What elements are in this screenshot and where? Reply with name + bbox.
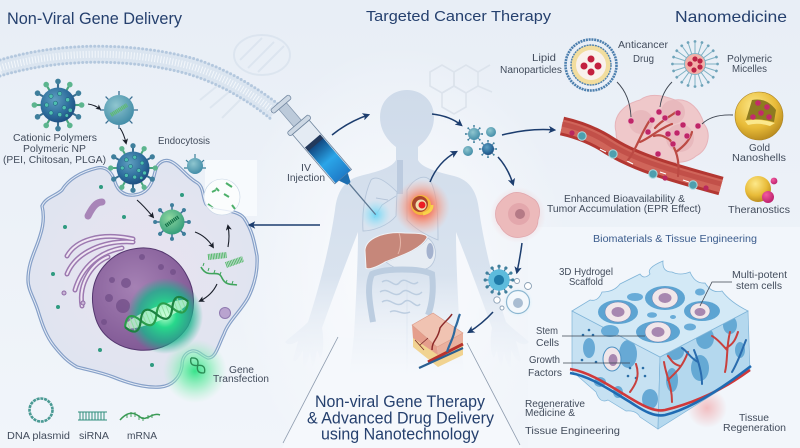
membrane inner highlight bbox=[28, 160, 257, 387]
vessel particles bbox=[569, 130, 709, 191]
cell body and membrane bbox=[28, 160, 257, 387]
top face bbox=[572, 261, 748, 357]
legend: DNA plasmid bbox=[7, 398, 70, 442]
mitochondrion bbox=[88, 202, 102, 216]
flange bbox=[287, 114, 311, 136]
label: Regenerative Medicine & Tissue Engineering bbox=[525, 399, 620, 437]
label: Growth Factors: Growth bbox=[529, 355, 560, 366]
label: Cationic Polymers bbox=[3, 133, 106, 166]
faint hexagon molecule bbox=[430, 65, 492, 114]
theranostics icon bbox=[745, 176, 777, 203]
gold nanoshell bbox=[735, 92, 783, 140]
label: Multi-potent stem cells bbox=[732, 270, 787, 292]
cell membrane bilayer arc bbox=[0, 46, 278, 120]
blood vessel bbox=[562, 124, 721, 186]
legend: mRNA: mRNA bbox=[127, 431, 157, 442]
main title bbox=[307, 393, 495, 444]
DNA in budding vesicle bbox=[188, 356, 207, 375]
trachea bbox=[397, 160, 403, 194]
tumor cell bbox=[490, 187, 546, 243]
label: Theranostics: Theranostics bbox=[728, 205, 790, 216]
label: Tissue Regeneration: Tissue bbox=[739, 413, 769, 424]
heading: Non-Viral Gene Delivery: Non-Viral Gene Delivery bbox=[7, 9, 182, 28]
nanoparticle: inside the cell bbox=[153, 203, 191, 241]
arrow: immune cells to skin bbox=[469, 312, 493, 332]
label: Stem Cells bbox=[536, 326, 559, 349]
label: Gold Nanoshells: Nanoshells bbox=[732, 153, 786, 164]
label: Polymeric Micelles: Polymeric bbox=[727, 54, 772, 65]
leader lines to tumor bbox=[617, 82, 733, 124]
arrow: syringe to body bbox=[332, 115, 368, 135]
label: IV Injection: IV bbox=[301, 163, 311, 174]
heading: Nanomedicine: Nanomedicine bbox=[675, 9, 787, 26]
legend: siRNA bbox=[78, 412, 109, 442]
label: EPR effect: Enhanced Bioavailability & bbox=[564, 194, 685, 205]
arrow: nanoparticles to nanomedicine bbox=[502, 130, 554, 135]
vesicle bbox=[220, 308, 230, 318]
blue liquid bbox=[308, 137, 351, 183]
faint background DNA bbox=[200, 35, 290, 118]
tumor glow bbox=[394, 179, 450, 235]
golgi apparatus bbox=[62, 236, 133, 306]
endosome bbox=[204, 179, 240, 215]
label: Gene Transfection: Gene bbox=[229, 365, 254, 376]
lungs bbox=[363, 177, 438, 240]
plunger seal bbox=[305, 134, 323, 151]
intestines bbox=[369, 270, 433, 322]
left face bbox=[572, 311, 660, 429]
bottom centre light wedge bbox=[282, 337, 522, 448]
label: Regenerative Medicine & Tissue Engineering: Medicine & bbox=[525, 408, 575, 419]
needle bbox=[348, 182, 376, 215]
heading: Targeted Cancer Therapy: Targeted Cancer Therapy bbox=[366, 8, 552, 25]
lipid nanoparticle bbox=[566, 40, 616, 90]
label: Multi-potent stem cells: stem cells bbox=[736, 281, 782, 292]
siRNA and mRNA in cytoplasm bbox=[201, 255, 243, 285]
main title: using Nanotechnology bbox=[321, 426, 480, 444]
label: EPR effect: Tumor Accumulation (EPR Effect) bbox=[547, 204, 701, 215]
cell bbox=[28, 160, 257, 403]
label: Tissue Regeneration: Regeneration bbox=[723, 423, 786, 434]
label: EPR effect bbox=[547, 194, 701, 215]
label: Multi-potent stem cells: Multi-potent bbox=[732, 270, 787, 281]
needle glow bbox=[355, 193, 397, 236]
immune cells and vesicles bbox=[484, 265, 533, 317]
label: Tissue Regeneration bbox=[723, 413, 786, 434]
heading: Biomaterials & Tissue Engineering: Biomaterials & Tissue Engineering bbox=[593, 234, 757, 245]
liver bbox=[365, 233, 427, 269]
label: Anticancer Drug: Anticancer bbox=[618, 40, 669, 51]
organs bbox=[363, 160, 450, 322]
arrow: NP to loaded NP bbox=[88, 104, 100, 109]
right face bbox=[658, 311, 750, 429]
pores on faces bbox=[583, 316, 745, 409]
pores on top bbox=[601, 288, 705, 337]
label: Growth Factors bbox=[528, 355, 562, 379]
label: Regenerative Medicine & Tissue Engineering: Tissue Engineering bbox=[525, 426, 620, 437]
label: Gene Transfection: Transfection bbox=[213, 374, 269, 385]
barrel bbox=[292, 120, 351, 184]
tumor vasculature branches bbox=[628, 112, 692, 176]
tumor cloud behind vessel bbox=[615, 95, 708, 162]
label: Stem Cells: Cells bbox=[536, 338, 559, 349]
label: Cationic Polymers: Cationic Polymers bbox=[13, 133, 97, 144]
legend: DNA plasmid: DNA plasmid bbox=[7, 431, 70, 442]
nanoparticle: small teal at membrane bbox=[184, 154, 206, 174]
nanoparticle cluster bbox=[463, 125, 497, 158]
arrows inside cell bbox=[137, 200, 229, 301]
growth factor dots bbox=[581, 329, 646, 379]
cytoplasm dots bbox=[51, 185, 184, 367]
nanoparticle: loaded with nucleic acid bbox=[100, 91, 138, 129]
legend: mRNA bbox=[120, 412, 160, 442]
nucleus bbox=[92, 248, 203, 354]
arrow: lung to nanoparticles bbox=[430, 152, 456, 182]
human body silhouette bbox=[285, 90, 529, 385]
plunger head bbox=[270, 94, 292, 114]
plunger rod bbox=[278, 102, 304, 130]
main blood vessels bbox=[570, 366, 751, 415]
stomach bbox=[386, 238, 436, 271]
hydrogel scaffold bbox=[570, 261, 751, 429]
label: 3D Hydrogel Scaffold: Scaffold bbox=[569, 277, 603, 288]
drug particles in tumor bbox=[628, 109, 701, 157]
main title: Non-viral Gene Therapy bbox=[315, 393, 486, 411]
label: Growth Factors: Factors bbox=[528, 368, 562, 379]
nanoparticle: polymeric NP bbox=[32, 79, 84, 131]
bottom-right panel background bbox=[528, 227, 800, 448]
label: Gene Transfection bbox=[213, 365, 269, 385]
label: Stem Cells: Stem bbox=[536, 326, 558, 337]
stem cells on top face bbox=[598, 286, 720, 343]
polymeric micelle bbox=[671, 40, 719, 88]
arrow: body to cell bbox=[250, 224, 320, 226]
label: Cationic Polymers: (PEI, Chitosan, PLGA) bbox=[3, 155, 106, 166]
label: Gold Nanoshells bbox=[732, 143, 786, 164]
label: Lipid Nanoparticles bbox=[500, 53, 562, 76]
glow: gene transfection bbox=[163, 339, 227, 403]
label: Polymeric Micelles: Micelles bbox=[732, 64, 767, 75]
left-face cell bbox=[603, 347, 621, 371]
label: 3D Hydrogel Scaffold: 3D Hydrogel bbox=[559, 267, 613, 278]
central light area bbox=[230, 0, 570, 448]
capillaries bbox=[630, 332, 746, 402]
hub bbox=[339, 173, 354, 187]
label: Polymeric Micelles bbox=[727, 54, 772, 75]
spleen bbox=[426, 243, 434, 259]
label: Anticancer Drug: Drug bbox=[633, 54, 654, 65]
DNA helix in nucleus bbox=[122, 294, 191, 334]
arrow: nanoparticles to tumor cell bbox=[498, 157, 513, 184]
nanoparticle: endocytosed at membrane bbox=[108, 143, 158, 193]
white endosome background bbox=[205, 160, 257, 216]
main title: & Advanced Drug Delivery bbox=[307, 410, 495, 428]
label: Cationic Polymers: Polymeric NP bbox=[23, 144, 86, 155]
label: Anticancer Drug bbox=[618, 40, 669, 65]
regeneration glow bbox=[687, 388, 727, 428]
label: Lipid Nanoparticles: Nanoparticles bbox=[500, 65, 562, 76]
arrow: head to nanoparticles bbox=[432, 114, 461, 125]
label: IV Injection: Injection bbox=[287, 173, 325, 184]
label: IV Injection bbox=[287, 163, 325, 184]
diagonal lines framing title bbox=[283, 337, 520, 445]
tumor bbox=[411, 195, 432, 215]
legend: siRNA: siRNA bbox=[79, 431, 109, 442]
arrow: loaded NP to cell bbox=[120, 128, 126, 143]
label: Lipid Nanoparticles: Lipid bbox=[532, 53, 556, 64]
leader lines: scaffold bbox=[562, 282, 732, 363]
label: Endocytosis: Endocytosis bbox=[158, 136, 210, 147]
label: 3D Hydrogel Scaffold bbox=[559, 267, 613, 288]
syringe bbox=[268, 92, 397, 236]
label: Regenerative Medicine & Tissue Engineering: Regenerative bbox=[525, 399, 585, 410]
arrow: tumor cell to immune cells bbox=[517, 243, 522, 272]
skin tissue block bbox=[412, 313, 463, 368]
arrows in central flow bbox=[250, 114, 554, 332]
label: Gold Nanoshells: Gold bbox=[749, 143, 770, 154]
